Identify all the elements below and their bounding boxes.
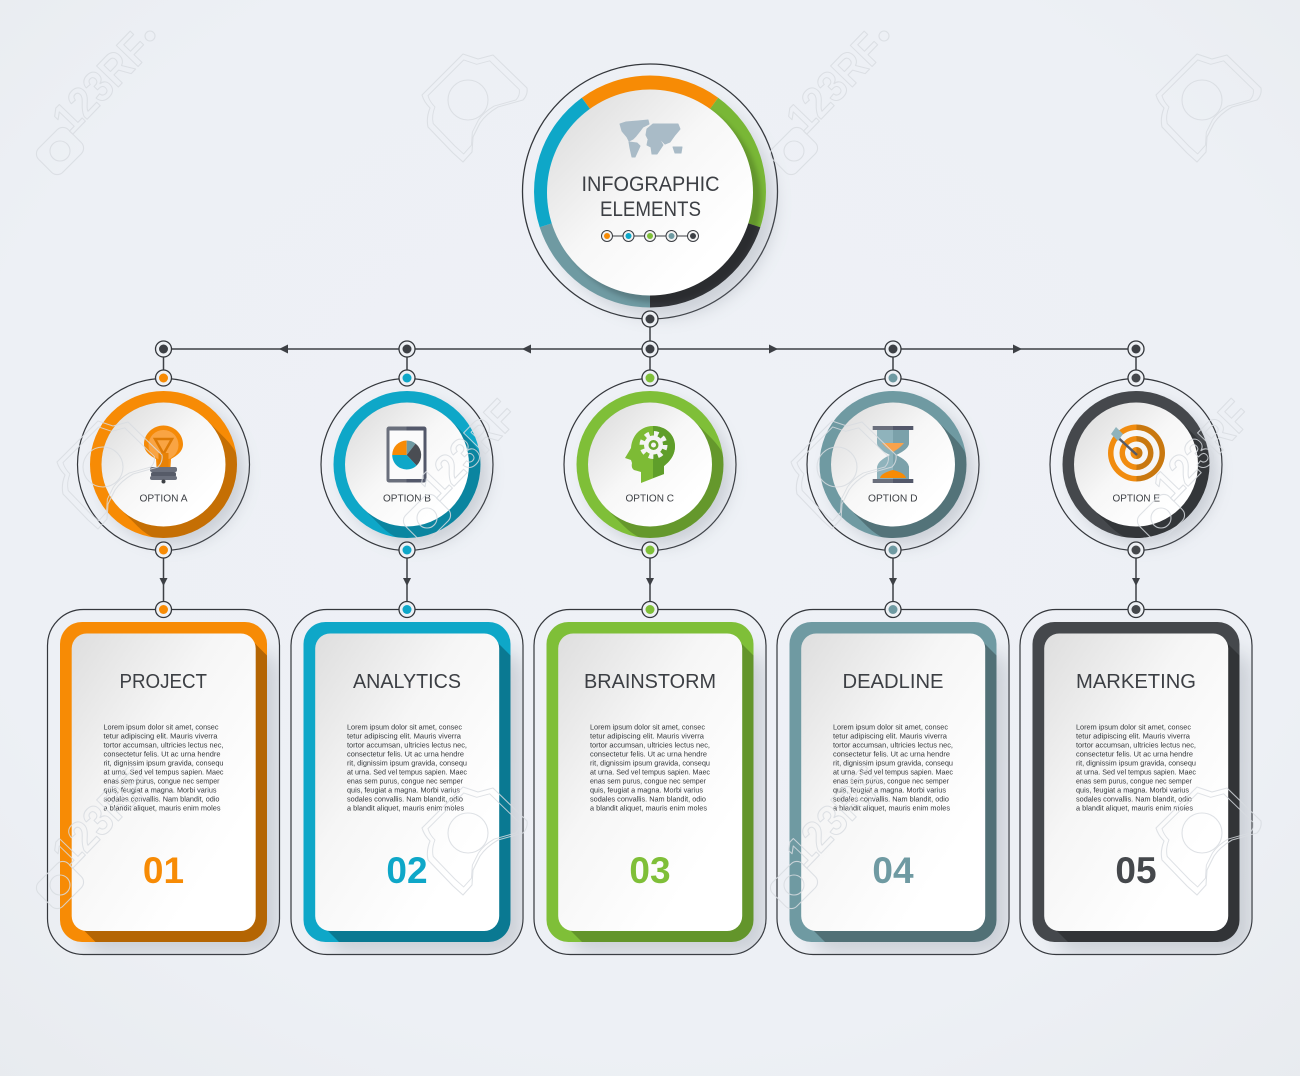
body text: sodales convallis. Nam blandit, odio [1076, 794, 1192, 804]
number 03: 03 [629, 850, 671, 891]
body text: sodales convallis. Nam blandit, odio [833, 794, 949, 804]
main circle: infographic elements [522, 64, 778, 319]
icon: tablet with pie chart [386, 426, 426, 482]
number 05: 05 [1115, 850, 1157, 891]
body text: consectetur felis. Ut ac urna hendre [1076, 750, 1193, 758]
icon: light bulb [144, 426, 183, 484]
body text: quis, feugiat a magna. Morbi varius [104, 786, 217, 794]
ring segment: green [711, 107, 754, 224]
body text: rit, dignissim ipsum gravida, consequ [347, 758, 467, 768]
body text: sodales convallis. Nam blandit, odio [347, 794, 463, 804]
body text [833, 722, 953, 812]
body text: a blandit aliquet, mauris enim moles [1076, 804, 1193, 812]
label: option E: OPTION E [1112, 492, 1160, 504]
body text: tortor accumsan, ultricies lectus nec, [833, 740, 953, 750]
body text: tortor accumsan, ultricies lectus nec, [590, 740, 710, 750]
stock watermarks: 123RF [777, 24, 894, 143]
body text [347, 722, 467, 812]
heading: marketing: MARKETING [1076, 671, 1196, 693]
body text: tetur adipiscing elit. Mauris viverra [833, 732, 948, 740]
stock watermarks: 123RF [777, 758, 894, 877]
stock watermarks: 123RF [43, 24, 160, 143]
number 02: 02 [386, 850, 428, 891]
stock watermarks [33, 24, 1261, 912]
body text: rit, dignissim ipsum gravida, consequ [1076, 758, 1196, 768]
body text: a blandit aliquet, mauris enim moles [590, 804, 707, 812]
label: option D: OPTION D [868, 492, 918, 504]
body text: enas sem purus, congue nec semper [590, 776, 706, 786]
ring segment: dark [650, 224, 749, 296]
body text: consectetur felis. Ut ac urna hendre [104, 750, 220, 758]
ring segment: orange [589, 88, 711, 107]
card 03: brainstorm [534, 610, 766, 954]
body text: at urna. Sed vel tempus sapien. Maec [833, 768, 953, 776]
body text: quis, feugiat a magna. Morbi varius [590, 786, 703, 794]
body text: consectetur felis. Ut ac urna hendre [590, 750, 707, 758]
heading: deadline: DEADLINE [842, 671, 944, 693]
body text: rit, dignissim ipsum gravida, consequ [833, 758, 953, 768]
option E circle [1050, 378, 1222, 550]
option D circle [807, 378, 979, 550]
body text: at urna. Sed vel tempus sapien. Maec [590, 768, 710, 776]
body text: a blandit aliquet, mauris enim moles [104, 804, 221, 812]
body text: consectetur felis. Ut ac urna hendre [833, 750, 950, 758]
body text: quis, feugiat a magna. Morbi varius [1076, 786, 1189, 794]
body text: enas sem purus, congue nec semper [1076, 776, 1192, 786]
heading: analytics: ANALYTICS [353, 671, 461, 693]
number 01: 01 [143, 850, 184, 891]
body text: Lorem ipsum dolor sit amet, consec [1076, 722, 1191, 732]
label: option A: OPTION A [140, 492, 188, 504]
title [582, 173, 720, 221]
body text: sodales convallis. Nam blandit, odio [590, 794, 706, 804]
body text: at urna. Sed vel tempus sapien. Maec [347, 768, 467, 776]
title: ELEMENTS [600, 198, 701, 221]
body text: at urna. Sed vel tempus sapien. Maec [1076, 768, 1196, 776]
body text: enas sem purus, congue nec semper [347, 776, 463, 786]
heading: project: PROJECT [120, 671, 207, 693]
body text [590, 722, 710, 812]
five-dot legend [602, 230, 698, 242]
body text: tetur adipiscing elit. Mauris viverra [590, 732, 705, 740]
body text: at urna. Sed vel tempus sapien. Maec [104, 768, 224, 776]
body text: quis, feugiat a magna. Morbi varius [833, 786, 946, 794]
body text: tetur adipiscing elit. Mauris viverra [104, 732, 218, 740]
ring segment: blue [546, 107, 589, 224]
title: INFOGRAPHIC [582, 173, 720, 196]
body text: enas sem purus, congue nec semper [104, 776, 220, 786]
option C circle [564, 378, 736, 550]
body text: Lorem ipsum dolor sit amet, consec [347, 722, 462, 732]
option B circle [321, 378, 493, 550]
body text [1076, 722, 1196, 812]
body text: Lorem ipsum dolor sit amet, consec [104, 722, 219, 732]
body text: tortor accumsan, ultricies lectus nec, [347, 740, 467, 750]
body text: tortor accumsan, ultricies lectus nec, [1076, 740, 1196, 750]
body text: tetur adipiscing elit. Mauris viverra [347, 732, 462, 740]
body text: tortor accumsan, ultricies lectus nec, [104, 740, 224, 750]
body text: a blandit aliquet, mauris enim moles [347, 804, 464, 812]
body text: sodales convallis. Nam blandit, odio [104, 794, 220, 804]
body text: rit, dignissim ipsum gravida, consequ [590, 758, 710, 768]
card 01: project [48, 610, 280, 954]
connector lines with arrows [160, 319, 1140, 609]
label: option C: OPTION C [626, 492, 674, 504]
heading: brainstorm: BRAINSTORM [584, 671, 716, 693]
label: option B: OPTION B [383, 492, 431, 504]
stock watermarks: 123RF [43, 758, 160, 877]
icon: target with dart [1108, 424, 1165, 482]
option A circle [78, 378, 250, 550]
icon: hourglass [873, 426, 913, 483]
body text: rit, dignissim ipsum gravida, consequ [104, 758, 224, 768]
body text: quis, feugiat a magna. Morbi varius [347, 786, 460, 794]
body text: consectetur felis. Ut ac urna hendre [347, 750, 464, 758]
number 04: 04 [872, 850, 914, 891]
card 02: analytics [291, 610, 523, 954]
body text: tetur adipiscing elit. Mauris viverra [1076, 732, 1191, 740]
card 04: deadline [777, 610, 1009, 954]
stock watermarks: 123RF [410, 391, 527, 510]
icon: world map [620, 120, 682, 157]
body text: Lorem ipsum dolor sit amet, consec [590, 722, 705, 732]
body text: a blandit aliquet, mauris enim moles [833, 804, 950, 812]
body text: enas sem purus, congue nec semper [833, 776, 949, 786]
ring segment: teal [551, 224, 650, 296]
icon: head with gear [625, 426, 675, 483]
card 05: marketing [1020, 610, 1252, 954]
body text [104, 722, 224, 812]
connector nodes [156, 311, 1144, 618]
stock watermarks: 123RF [1144, 391, 1261, 510]
body text: Lorem ipsum dolor sit amet, consec [833, 722, 948, 732]
